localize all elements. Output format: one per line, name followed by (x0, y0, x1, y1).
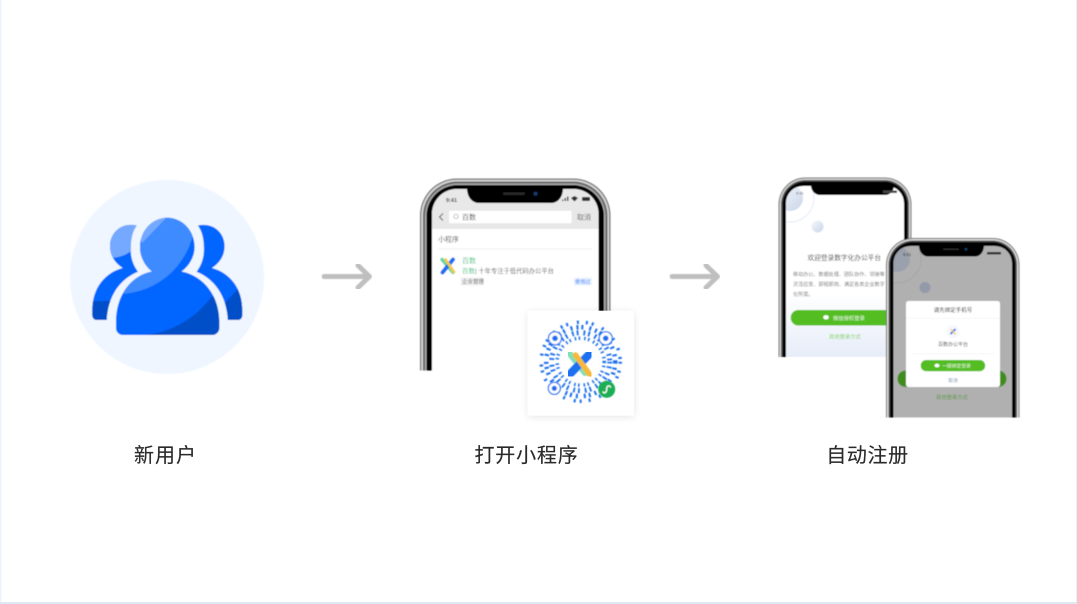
icon: main person (115, 217, 220, 336)
dimmed other login: 其他登录方式 (936, 393, 968, 401)
notch (811, 185, 894, 195)
welcome text: 欢迎登录数字化办公平台 (808, 253, 881, 262)
search bar: 百数 (462, 213, 476, 222)
label: open mini program: 打开小程序 (474, 444, 578, 467)
description: 灵活应变、即租即用、满足各类企业数字 (793, 281, 885, 288)
dimmed button (898, 370, 1006, 387)
arrow: step 2 to step 3 (672, 266, 718, 288)
result text: | 十年专注于低代码办公平台 (475, 266, 554, 275)
icon background circle (70, 180, 264, 374)
wechat login button: 微信授权登录 (833, 314, 865, 322)
search bar: 取消 (577, 213, 591, 222)
status bar: 9:41 (796, 190, 805, 196)
bind phone dialog: 请先绑定手机号 (934, 306, 973, 314)
status bar: 9:41 (903, 252, 912, 257)
decorative circles (785, 186, 824, 233)
result text: 企业管理 (462, 278, 485, 286)
result text: 百数 (462, 256, 476, 265)
QR pattern (541, 322, 620, 401)
QR code card (528, 311, 634, 417)
notch (919, 245, 984, 256)
label: new user: 新用户 (134, 444, 197, 467)
section title: 小程序 (438, 234, 459, 244)
card shadow (528, 312, 634, 417)
QR finder rings (548, 332, 612, 394)
wechat login button (791, 310, 901, 326)
result text: 百数 (462, 266, 476, 275)
bind phone dialog (906, 301, 1000, 387)
status bar: 9:41 (446, 198, 457, 204)
bind phone dialog: 取消 (948, 377, 958, 384)
description: 化所需。 (793, 291, 813, 298)
bind phone dialog: 百数办公平台 (938, 341, 968, 348)
result logo (442, 260, 454, 272)
label: auto register: 自动注册 (826, 444, 909, 467)
description (793, 271, 885, 298)
camera (503, 192, 538, 196)
arrow: step 1 to step 2 (324, 266, 370, 288)
step 3: phone with bind dialog (885, 237, 1020, 418)
status bar (903, 248, 1001, 257)
other login link: 其他登录方式 (829, 332, 861, 340)
icon: right person (196, 224, 244, 321)
phone body (885, 237, 1020, 418)
decorative circles (892, 246, 931, 294)
step 2: phone with mini program search (419, 178, 612, 372)
mini program badge (598, 381, 615, 398)
result text: 使用过 (575, 278, 591, 286)
dialog logo (946, 325, 960, 338)
notch (467, 188, 563, 203)
phone body (778, 176, 912, 358)
status bar (796, 190, 897, 196)
icon: left person (92, 224, 138, 321)
search header (432, 189, 598, 229)
step 1: new user (70, 180, 264, 374)
one tap bind button: 一键绑定登录 (942, 362, 971, 370)
description: 移动办公、数据处理、团队协作、邻接等 (793, 271, 885, 278)
status bar (446, 196, 590, 204)
result text (460, 256, 592, 286)
QR center logo (570, 354, 590, 375)
phone body (419, 178, 612, 372)
step 3: welcome phone (778, 176, 912, 358)
search bar (440, 211, 591, 223)
